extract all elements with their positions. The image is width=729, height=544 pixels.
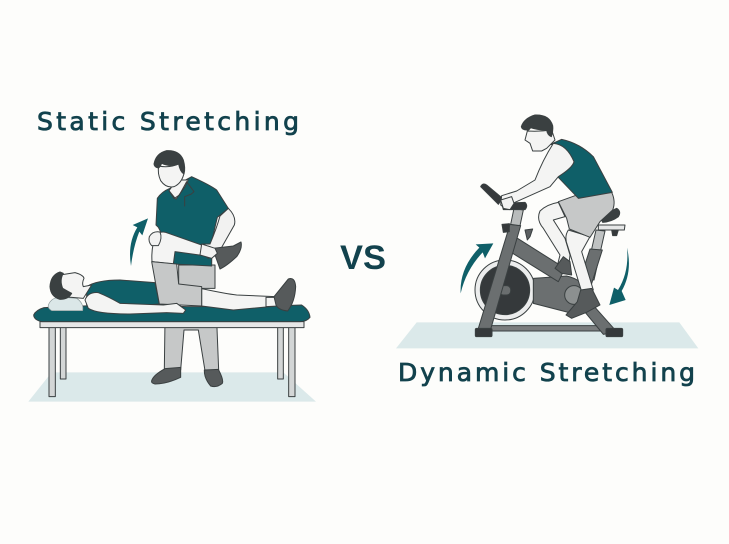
face bbox=[525, 130, 555, 151]
scene: dynamic stretching bbox=[396, 115, 698, 348]
patient body bbox=[85, 262, 296, 314]
base rail bbox=[488, 326, 608, 331]
scene: static stretching bbox=[28, 151, 316, 402]
back leg bbox=[539, 202, 570, 270]
seat post bbox=[585, 230, 605, 280]
floor mat bbox=[396, 322, 698, 348]
hair bbox=[521, 115, 553, 137]
treatment table legs bbox=[49, 327, 295, 397]
feet bbox=[475, 328, 492, 337]
pillow bbox=[48, 297, 83, 311]
front leg bbox=[566, 230, 593, 292]
main frame bbox=[507, 236, 565, 282]
exercise bike bbox=[475, 184, 625, 337]
arrow: upward stretch bbox=[130, 218, 148, 266]
cyclist bbox=[501, 115, 614, 318]
arm bbox=[501, 143, 574, 208]
tank top bbox=[551, 139, 612, 198]
flywheel bbox=[475, 260, 535, 320]
seat bar bbox=[598, 225, 625, 230]
front shoe bbox=[566, 288, 600, 318]
therapist arm bbox=[200, 208, 235, 258]
title: dynamic stretching: Dynamic Stretching bbox=[398, 358, 695, 387]
arrow: upward left of flywheel bbox=[461, 243, 493, 293]
therapist legs and shoes bbox=[152, 320, 223, 387]
label: vs: VS bbox=[340, 239, 386, 277]
handle post bbox=[511, 208, 523, 226]
patient head bbox=[50, 272, 92, 299]
handlebars bbox=[481, 184, 527, 210]
therapist torso and head bbox=[154, 151, 228, 288]
rear frame bbox=[579, 249, 602, 287]
adjusters bbox=[502, 224, 509, 232]
table pad bbox=[34, 305, 310, 322]
hand bbox=[501, 197, 514, 210]
crank housing bbox=[533, 276, 587, 312]
shorts bbox=[558, 192, 614, 237]
table frame bbox=[40, 322, 304, 328]
back shoe bbox=[555, 257, 572, 275]
title: static stretching: Static Stretching bbox=[37, 107, 299, 136]
raised leg of patient bbox=[149, 232, 241, 269]
floor mat bbox=[28, 372, 316, 402]
arrow: downward right of seat bbox=[609, 248, 629, 305]
seat bbox=[602, 208, 620, 222]
